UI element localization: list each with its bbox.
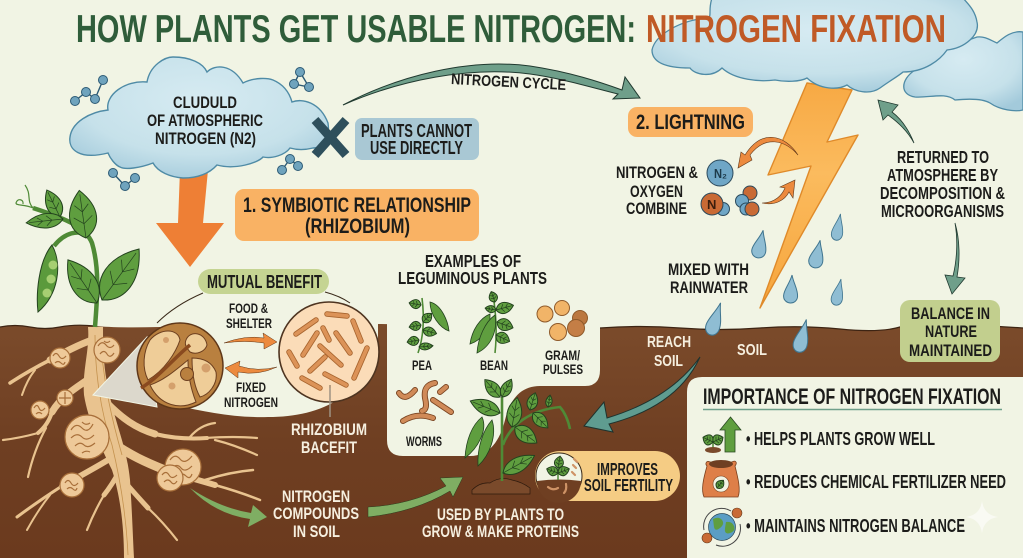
- cloud: main storm: [652, 0, 977, 92]
- icon: pea plant: [406, 298, 449, 353]
- raindrops: [704, 213, 846, 354]
- callout: improves soil fertility: SOIL FERTILITY: [584, 475, 673, 495]
- label: food and shelter: [226, 300, 272, 331]
- label: used by plants: [422, 505, 579, 541]
- cloud: atmospheric nitrogen: OF ATMOSPHERIC: [147, 111, 263, 130]
- label: reach soil: SOIL: [654, 353, 683, 370]
- label: food and shelter: FOOD &: [229, 300, 268, 316]
- label: worms: WORMS: [406, 434, 442, 449]
- arrow: rain nitrogen to plants: [584, 357, 700, 432]
- heading: examples of leguminous plants: LEGUMINOUS PLANTS: [398, 268, 547, 288]
- icon: nitrogen and oxygen molecules: [701, 160, 759, 216]
- label: nitrogen and oxygen combine: COMBINE: [626, 199, 687, 218]
- stem and shoot: [33, 208, 97, 327]
- magnified nodule cross-section: [93, 292, 350, 409]
- label: gram pulses: PULSES: [543, 362, 583, 377]
- label: food and shelter: SHELTER: [226, 315, 272, 331]
- arrow: compounds to plant: [368, 477, 463, 517]
- arrow: molecules to lightning: [762, 180, 795, 204]
- label: fixed nitrogen: FIXED: [236, 379, 266, 395]
- bullet: helps plants: • HELPS PLANTS GROW WELL: [746, 429, 935, 449]
- label: rhizobium bacefit: BACEFIT: [301, 438, 357, 457]
- label: reach soil: [647, 334, 691, 370]
- callout: improves soil fertility: IMPROVES: [597, 459, 658, 479]
- label: fixed nitrogen: NITROGEN: [224, 394, 278, 410]
- panel: importance of nitrogen fixation: [687, 377, 1023, 558]
- callout: plants cannot use directly: USE DIRECTLY: [370, 138, 463, 158]
- label: mixed with rainwater: [668, 260, 749, 297]
- arrow: nitrogen cycle: NITROGEN CYCLE: [451, 71, 566, 94]
- label: bean: BEAN: [480, 358, 508, 373]
- callout: improves soil fertility: [535, 451, 680, 503]
- icon: worms: [399, 383, 451, 421]
- label: mutual benefit: [198, 269, 329, 294]
- arrow: orange down from cloud: [156, 170, 224, 267]
- label: nitrogen and oxygen combine: NITROGEN &: [616, 163, 698, 182]
- cloud: atmospheric nitrogen: [70, 57, 328, 178]
- icon: nitrogen and oxygen molecules: N: [707, 197, 716, 212]
- callout: plants cannot use directly: [355, 118, 479, 160]
- callout: balance in nature: [900, 300, 1000, 362]
- rhizobium bacteria circle: [279, 302, 379, 402]
- icon: growth arrow: [701, 417, 741, 453]
- arrow: fixed nitrogen to nodule: [225, 361, 277, 378]
- icon: cross mark: [315, 120, 346, 155]
- label: reach soil: REACH: [647, 334, 691, 351]
- young legume plant: [465, 376, 570, 494]
- heading: lightning: 2. LIGHTNING: [636, 111, 745, 134]
- storm clouds and lightning: [652, 0, 1023, 308]
- label: gram pulses: GRAM/: [545, 348, 580, 363]
- callout: plants cannot use directly: PLANTS CANNOT: [361, 121, 472, 141]
- decorative sparkle: [966, 501, 998, 533]
- title: HOW PLANTS GET USABLE NITROGEN:: [76, 8, 636, 51]
- label: rhizobium bacefit: RHIZOBIUM: [291, 420, 367, 439]
- cloud: back right: [904, 32, 1023, 111]
- pea pod: [37, 245, 58, 312]
- arrow: return to atmosphere: [878, 100, 914, 143]
- arrow: down to balance: [945, 223, 965, 294]
- label: soil: SOIL: [737, 342, 767, 359]
- label: returned to atmosphere: RETURNED TO: [897, 147, 989, 167]
- label: nitrogen compounds in soil: COMPOUNDS: [273, 504, 359, 523]
- label: used by plants: USED BY PLANTS TO: [437, 505, 564, 524]
- icon: nitrogen and oxygen molecules: N₂: [714, 166, 727, 181]
- label: nitrogen compounds in soil: [273, 487, 359, 541]
- icon: soil cross-section: [536, 453, 582, 503]
- soil ground: [0, 320, 1023, 558]
- label: gram pulses: [543, 348, 583, 377]
- heading: symbiotic relationship: [235, 189, 479, 241]
- arrow: roots to nitrogen compounds: [190, 488, 267, 527]
- arrow: food to bacteria: [224, 333, 277, 349]
- arrow: lightning to n2: [738, 137, 798, 168]
- callout: balance in nature: MAINTAINED: [909, 341, 992, 360]
- heading: examples of leguminous plants: EXAMPLES OF: [425, 251, 521, 271]
- callout: balance in nature: BALANCE IN: [911, 304, 990, 323]
- label: returned to atmosphere: [880, 147, 1005, 221]
- nitrogen molecules around cloud: [70, 68, 314, 190]
- label: fixed nitrogen: [224, 379, 278, 410]
- label: used by plants: GROW & MAKE PROTEINS: [422, 522, 579, 541]
- icon: gram pulses: [537, 300, 588, 340]
- label: mutual benefit: MUTUAL BENEFIT: [207, 272, 322, 292]
- label: nitrogen and oxygen combine: OXYGEN: [630, 182, 683, 201]
- leaves: [25, 187, 151, 310]
- icon: bean plant: [470, 290, 515, 353]
- label: nitrogen compounds in soil: IN SOIL: [293, 522, 340, 541]
- cloud: atmospheric nitrogen: CLUDULD: [173, 93, 237, 112]
- heading: lightning: [628, 107, 753, 137]
- label: nitrogen compounds in soil: NITROGEN: [282, 487, 350, 506]
- icon: globe nitrogen balance: [702, 508, 742, 546]
- icon: fertilizer sack: [703, 460, 739, 497]
- callout: balance in nature: NATURE: [925, 322, 977, 341]
- tendril: [16, 185, 33, 208]
- heading: symbiotic relationship: (RHIZOBIUM): [305, 215, 410, 238]
- heading: examples of leguminous plants: [398, 251, 547, 288]
- pea plant with roots: [3, 185, 260, 558]
- label: nitrogen and oxygen combine: [616, 163, 698, 218]
- arrow: nitrogen cycle: [343, 64, 640, 105]
- cloud: atmospheric nitrogen: NITROGEN (N2): [155, 129, 256, 148]
- roots: [3, 327, 260, 558]
- label: mixed with rainwater: RAINWATER: [670, 278, 748, 297]
- heading: symbiotic relationship: 1. SYMBIOTIC RELATIONSHIP: [243, 194, 471, 217]
- lightning bolt: [760, 83, 858, 308]
- label: pea: PEA: [412, 358, 432, 373]
- label: rhizobium bacefit: [291, 385, 367, 457]
- label: mixed with rainwater: MIXED WITH: [668, 260, 749, 279]
